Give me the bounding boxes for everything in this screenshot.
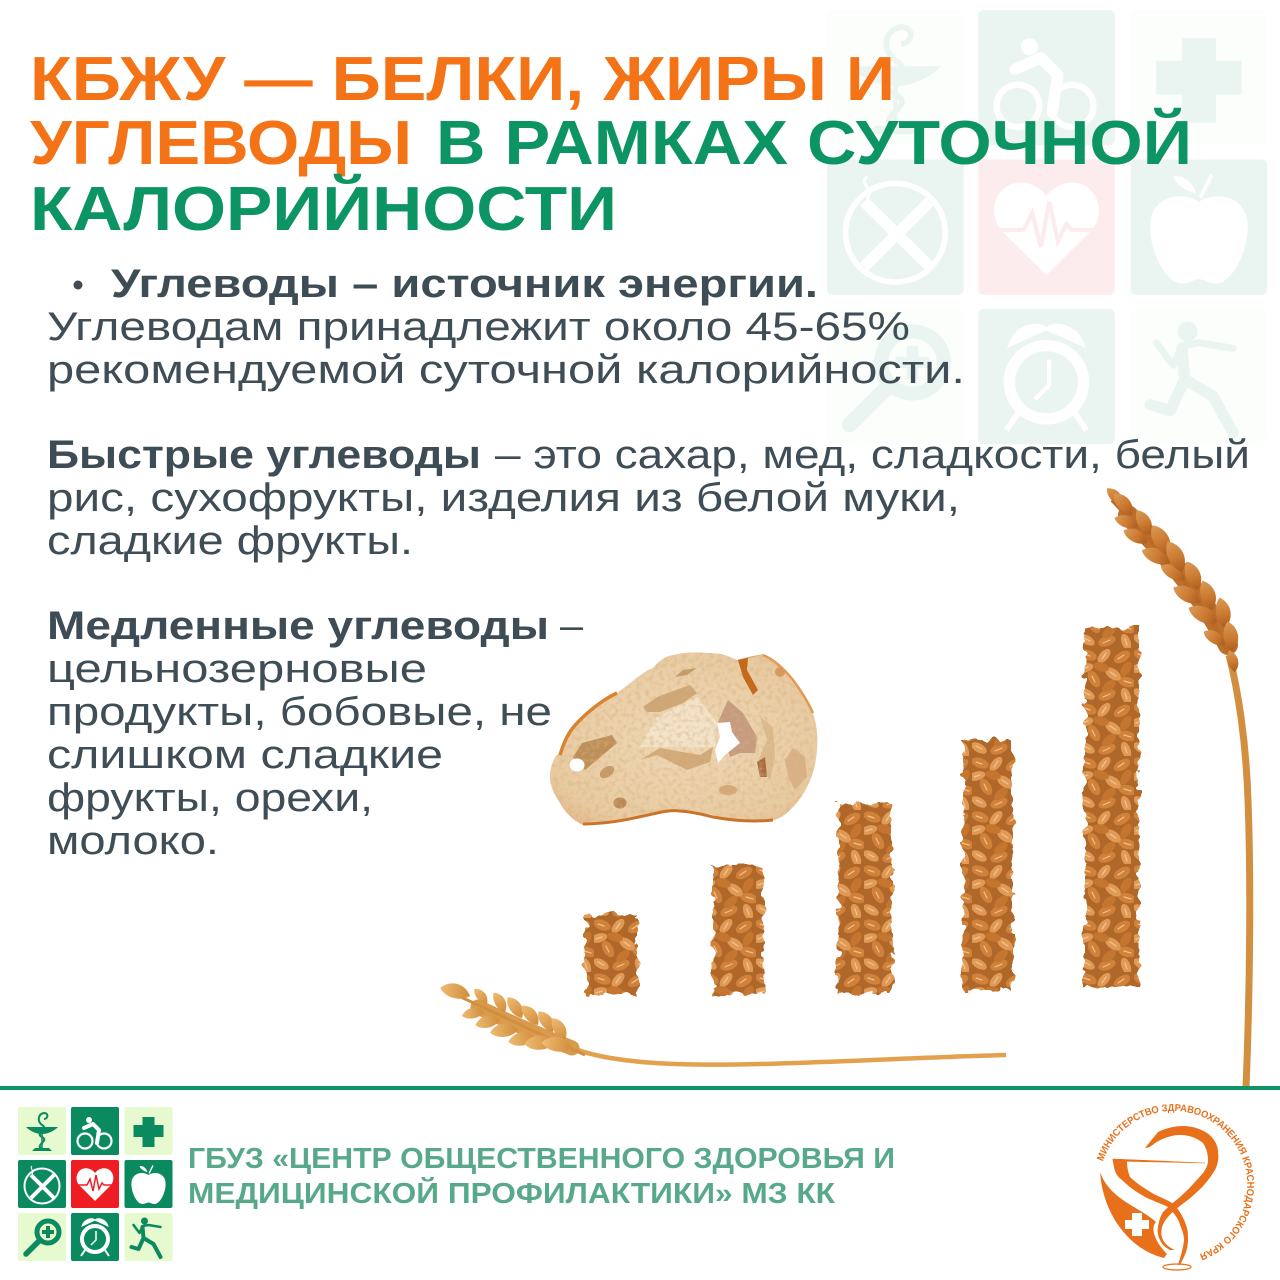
icon: cyclist <box>71 1107 119 1155</box>
ministry logo: МИНИСТЕРСТВО ЗДРАВООХРАНЕНИЯ КРАСНОДАРСКОГО КРАЯ <box>1096 1104 1254 1260</box>
icon: heart with pulse <box>71 1160 119 1208</box>
text block: energy source <box>47 262 965 392</box>
title: В РАМКАХ СУТОЧНОЙ <box>436 108 1192 178</box>
text block: energy source: Углеводам принадлежит около 45-65% <box>47 305 910 349</box>
crust <box>560 693 617 755</box>
illustration: lying wheat ear <box>439 980 1006 1065</box>
text block: fast carbohydrates: сладкие фрукты. <box>47 519 413 563</box>
text block: fast carbohydrates <box>47 433 1250 563</box>
icon: bowl of Hygieia <box>18 1107 66 1155</box>
illustration: slice of bread <box>548 650 820 828</box>
bar 4 <box>947 725 1031 1005</box>
staff strand <box>1113 1161 1188 1265</box>
title: КБЖУ — БЕЛКИ, ЖИРЫ И <box>30 45 895 114</box>
title: УГЛЕВОДЫ <box>30 109 412 178</box>
footer divider <box>0 1086 1280 1090</box>
text block: slow carbohydrates: продукты, бобовые, не <box>47 690 552 734</box>
icon: runner <box>124 1213 172 1261</box>
bar 1 <box>570 900 654 1010</box>
chart: wheat grain bars <box>570 615 1153 1010</box>
text block: fast carbohydrates: Быстрые углеводы <box>47 433 481 477</box>
text block: energy source: Углеводы – источник энергии. <box>111 262 818 306</box>
bar 2 <box>697 850 781 1010</box>
footer logo: health icons grid <box>18 1107 172 1261</box>
icon: apple <box>124 1160 172 1208</box>
bar 5 <box>1069 615 1153 1000</box>
footer organisation name <box>188 1143 895 1210</box>
holes in the crumb <box>715 722 740 763</box>
text block: fast carbohydrates: – это сахар, мед, сладкости, белый <box>495 433 1250 477</box>
text block: energy source: рекомендуемой суточной калорийности. <box>47 348 965 392</box>
bowl rim <box>1113 1159 1205 1163</box>
leaf with cross <box>1100 1172 1167 1258</box>
crumb texture <box>548 650 820 828</box>
footer organisation name: МЕДИЦИНСКОЙ ПРОФИЛАКТИКИ» МЗ КК <box>188 1177 836 1210</box>
text block: slow carbohydrates: фрукты, орехи, <box>47 776 373 820</box>
title <box>30 45 1192 244</box>
icon: magnifier <box>18 1213 66 1261</box>
text block: slow carbohydrates <box>47 604 584 863</box>
watermark: health icons grid <box>827 10 1267 444</box>
icon: no smoking <box>18 1160 66 1208</box>
icon: alarm clock <box>71 1213 119 1261</box>
text block: slow carbohydrates: – <box>560 604 584 648</box>
icon: medical cross <box>124 1107 172 1155</box>
illustration: standing wheat ear <box>1104 484 1250 1088</box>
footer organisation name: ГБУЗ «ЦЕНТР ОБЩЕСТВЕННОГО ЗДОРОВЬЯ И <box>188 1143 895 1175</box>
text block: fast carbohydrates: рис, сухофрукты, изделия из белой муки, <box>47 476 960 520</box>
text block: slow carbohydrates: цельнозерновые <box>47 647 427 691</box>
title: КАЛОРИЙНОСТИ <box>30 174 617 244</box>
bar 3 <box>822 790 906 1010</box>
text block: slow carbohydrates: молоко. <box>47 819 219 863</box>
text block: slow carbohydrates: слишком сладкие <box>47 733 443 777</box>
text block: slow carbohydrates: Медленные углеводы <box>47 604 549 648</box>
snake <box>1145 1126 1218 1250</box>
